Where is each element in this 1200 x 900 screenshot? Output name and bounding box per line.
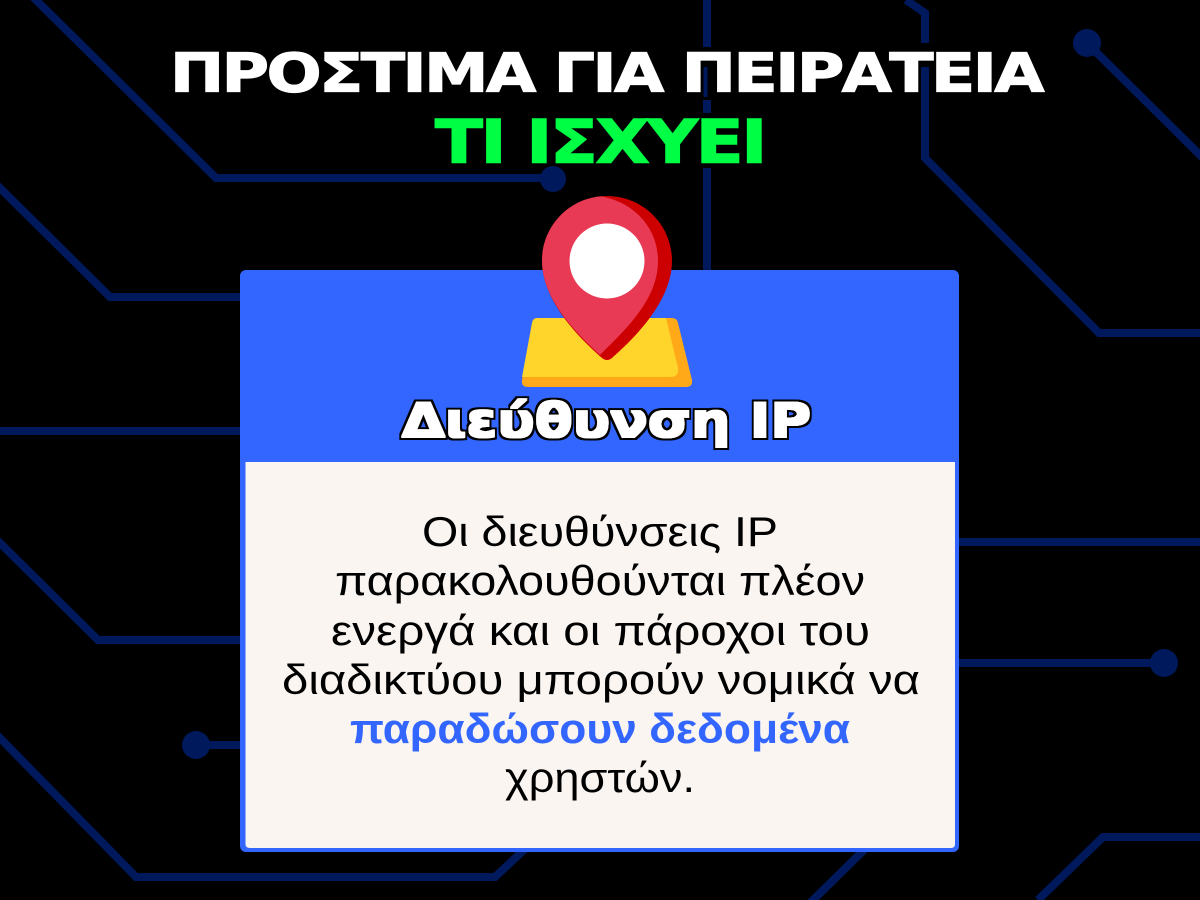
card body text [282, 508, 920, 801]
title [170, 44, 1044, 178]
panel: IP address card [240, 196, 959, 852]
plate [522, 318, 692, 387]
title line two: ΤΙ ΙΣΧΥΕΙ [435, 108, 765, 178]
card body text: διαδικτύου μπορούν νομικά να [282, 656, 920, 703]
card frame [240, 270, 959, 852]
icon: map pin on yellow plate [522, 196, 692, 387]
card body text: χρηστών. [505, 754, 695, 801]
card body text: Οι διευθύνσεις IP [422, 508, 778, 555]
title line one: ΠΡΟΣΤΙΜΑ ΓΙΑ ΠΕΙΡΑΤΕΙΑ [170, 44, 1044, 104]
card heading: Διεύθυνση IP [402, 394, 811, 449]
card body text: ενεργά και οι πάροχοι του [331, 607, 870, 654]
highlighted phrase: παραδώσουν δεδομένα [350, 705, 850, 752]
card body [246, 462, 955, 848]
card body text: παρακολουθούνται πλέον [335, 557, 865, 604]
pin [542, 196, 672, 360]
